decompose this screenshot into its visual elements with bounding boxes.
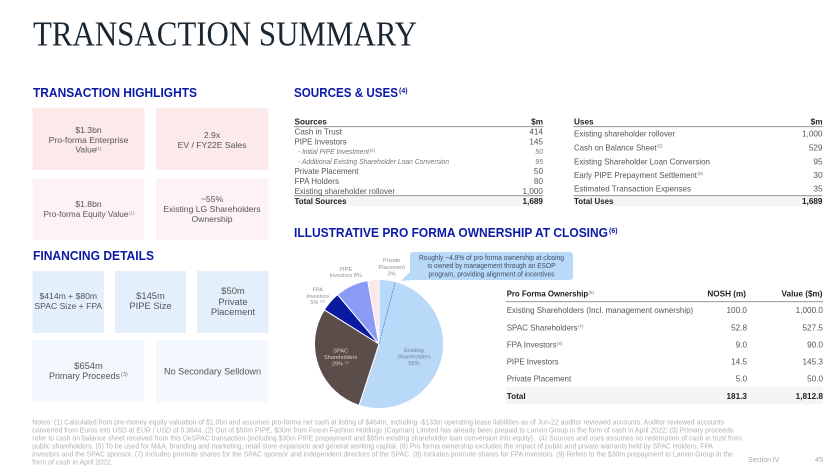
panel: LG shareholders ownership: Ownership (191, 214, 233, 224)
panel: PIPE size: $145m (136, 290, 165, 301)
table: pro forma ownership: 1,812.8 (796, 392, 823, 401)
table: uses: Cash on Balance Sheet (574, 143, 657, 152)
table: sources: 80 (534, 177, 543, 186)
table: pro forma ownership: 181.3 (726, 392, 747, 401)
panel: equity value (32, 178, 144, 240)
panel: primary proceeds (32, 340, 144, 402)
table: pro forma ownership: 90.0 (807, 341, 823, 350)
table: uses: Existing Shareholder Loan Conversion (574, 157, 710, 166)
table: sources: 95 (535, 159, 543, 166)
table: sources: Sources (294, 118, 327, 126)
panel: private placement: $50m (221, 285, 245, 296)
label: PIPE investors: PIPE (339, 267, 352, 273)
slice: existing shareholders (359, 280, 444, 408)
table: sources: - Additional Existing Shareholder Loan Conversion (298, 159, 449, 166)
footnotes: form of cash in April 2022. (32, 458, 113, 466)
panel: EV / sales: EV / FY22E Sales (178, 140, 246, 150)
table: uses: 95 (813, 157, 823, 166)
panel: SPAC size + FPA: SPAC Size + FPA (34, 301, 102, 311)
table: pro forma ownership: 145.3 (802, 358, 823, 367)
panel: primary proceeds: Primary Proceeds (49, 370, 120, 381)
table: pro forma ownership: (6) (588, 290, 595, 295)
footnotes (32, 418, 742, 466)
label: PIPE investors: Investors 8% (330, 273, 362, 279)
table: pro forma ownership: 527.5 (802, 323, 823, 332)
panel: LG shareholders ownership: Existing LG Shareholders (163, 204, 261, 214)
table: pro forma ownership: 100.0 (726, 306, 747, 315)
panel: private placement (197, 271, 268, 333)
table: uses: 30 (813, 171, 823, 180)
panel: enterprise value: Value (75, 144, 97, 154)
label: existing shareholders (397, 348, 431, 367)
label: FPA investors: 5% ⁽⁸⁾ (310, 299, 326, 306)
label: private placement: 3% (388, 272, 396, 278)
callout: ESOP note: Roughly ~4.8% of pro forma ownership at closing (419, 253, 564, 262)
panel: equity value: $1.8bn (75, 199, 102, 209)
panel: primary proceeds: $654m (74, 360, 103, 371)
heading: transaction highlights: TRANSACTION HIGHLIGHTS (33, 86, 197, 100)
slice: private placement (368, 280, 379, 344)
table: sources: Existing shareholder rollover (294, 187, 395, 196)
title: TRANSACTION SUMMARY (33, 16, 417, 54)
footer: section label: Section IV (748, 455, 779, 464)
table: sources: $m (531, 118, 543, 126)
label: existing shareholders: Shareholders (397, 354, 431, 360)
table: uses (574, 118, 823, 206)
panel: private placement: Private (218, 296, 248, 307)
table: pro forma ownership: Total (507, 392, 526, 401)
table: uses: 1,000 (802, 130, 823, 139)
panel: SPAC size + FPA (32, 271, 104, 333)
table: pro forma ownership: 9.0 (736, 341, 747, 350)
table: pro forma ownership: 5.0 (736, 375, 747, 384)
label: existing shareholders: Existing (404, 348, 424, 354)
table: uses: (5) (657, 144, 663, 148)
footnotes: public shareholders. (5) To be used for M&A, branding and marketing, retail store expansion and general working capital. (6) Pro forma ownership excludes the impact of public and private warrants held by SPAC Holders, FPA (32, 442, 713, 450)
label: private placement: Placement (378, 265, 405, 271)
table: pro forma ownership: 1,000.0 (796, 306, 823, 315)
table: uses: Estimated Transaction Expenses (574, 185, 691, 194)
label: SPAC shareholders: 29% ⁽⁷⁾ (332, 361, 350, 368)
footnotes: investors and the SPAC sponsor. (7) Includes promote shares for the SPAC sponsor and independent directors of the SPAC. (8) Includes promote shares for FPA investors. (9) Refers to the $30m prepayment to Lanvin Group in the (32, 450, 733, 458)
table: pro forma ownership: FPA Investors (507, 341, 557, 350)
table: uses: Early PIPE Prepayment Settlement (574, 171, 698, 180)
label: private placement (378, 258, 405, 278)
panel: equity value: Pro-forma Equity Value (44, 209, 129, 219)
heading: illustrative pro forma ownership: ILLUSTRATIVE PRO FORMA OWNERSHIP AT CLOSING (294, 226, 608, 240)
label: existing shareholders: 55% (408, 361, 420, 367)
panel: PIPE size: PIPE Size (129, 300, 172, 311)
heading: financing details: FINANCING DETAILS (33, 249, 154, 263)
table: uses: 1,689 (802, 197, 823, 206)
panel: enterprise value: $1.3bn (75, 125, 102, 135)
slice: FPA investors (324, 295, 379, 344)
pie chart: pro forma ownership (306, 258, 444, 408)
footnotes: converted from Euros into USD at EUR / USD of 0.9844. (2) Out of $50m PIPE, $30m from Fosun Fashion Holdings (Cayman) Limited has already been prepaid to Lanvin Group in the form of cash in April 2022; (3) Primary proceeds (32, 426, 734, 434)
label: SPAC shareholders: Shareholders (324, 355, 358, 361)
table: sources: 145 (529, 138, 543, 147)
panel: PIPE size (115, 271, 186, 333)
table: pro forma ownership: (8) (557, 341, 563, 346)
table: pro forma ownership: Private Placement (507, 375, 572, 384)
table: uses: 529 (809, 143, 823, 152)
slice: PIPE investors (338, 280, 379, 344)
table: sources: Private Placement (294, 167, 359, 176)
panel: LG shareholders ownership: ~55% (201, 194, 223, 204)
table: pro forma ownership: 50.0 (807, 375, 823, 384)
table: sources: Total Sources (294, 197, 347, 206)
panel: SPAC size + FPA: $414m + $80m (40, 291, 97, 301)
table: sources: 1,689 (522, 197, 543, 206)
table: sources: PIPE Investors (294, 138, 346, 147)
table: pro forma ownership: (7) (578, 324, 584, 329)
table: sources (294, 118, 544, 206)
panel: equity value: (1) (129, 210, 135, 216)
panel: no secondary selldown: No Secondary Selldown (164, 366, 261, 376)
table: pro forma ownership: 52.8 (731, 323, 747, 332)
table: uses: Existing shareholder rollover (574, 130, 675, 139)
table: uses: (9) (698, 171, 704, 176)
footer: page number: 45 (815, 455, 823, 464)
heading: illustrative pro forma ownership: (6) (609, 228, 618, 235)
table: pro forma ownership: PIPE Investors (507, 358, 559, 367)
heading: sources and uses: SOURCES & USES (294, 86, 398, 100)
table: sources: - Initial PIPE Investment (298, 149, 370, 156)
table: uses: 35 (813, 185, 823, 194)
table: pro forma ownership: Existing Shareholders (Incl. management ownership) (507, 306, 693, 315)
panel: enterprise value: Pro-forma Enterprise (49, 135, 129, 145)
label: SPAC shareholders: SPAC (333, 349, 348, 355)
callout: ESOP note: program, providing alignment of incentives (428, 270, 555, 278)
panel: primary proceeds: (3) (121, 372, 128, 378)
ESOP dashed divider (379, 283, 395, 344)
table: sources: (2) (370, 148, 376, 153)
table: pro forma ownership: SPAC Shareholders (507, 323, 578, 332)
table: sources: Cash in Trust (294, 128, 343, 137)
heading: sources and uses: (4) (399, 88, 408, 95)
table: sources: 50 (534, 167, 543, 176)
table: sources: 50 (535, 149, 543, 156)
table: pro forma ownership: NOSH (m) (707, 290, 746, 298)
panel: EV / sales: 2.9x (204, 130, 221, 140)
panel: enterprise value: (1) (96, 146, 102, 151)
label: FPA investors: Investors (306, 294, 329, 300)
label: FPA investors: FPA (312, 288, 323, 294)
label: SPAC shareholders (324, 349, 358, 368)
table: uses: $m (811, 118, 822, 126)
panel: private placement: Placement (211, 306, 256, 317)
table: sources: 414 (529, 128, 543, 137)
panel: no secondary selldown (156, 340, 268, 402)
panel: EV / sales (156, 108, 268, 170)
panel: LG shareholders ownership (156, 178, 268, 240)
callout: ESOP note: is owned by management through an ESOP (428, 261, 556, 270)
table: pro forma ownership: Value ($m) (782, 290, 823, 298)
label: FPA investors (306, 288, 329, 306)
label: private placement: Private (383, 258, 400, 264)
footnotes: Notes: (1) Calculated from pre-money equity valuation of $1.0bn and assumes pro-forma net cash at listing of $464m, including -$133m operating lease liabilities as of Jun-22 auditor reviewed accounts. Auditor reviewed accounts (32, 418, 724, 426)
callout: ESOP note (401, 252, 573, 281)
table: uses: Total Uses (574, 197, 614, 206)
table: uses: Uses (574, 118, 594, 126)
table: sources: 1,000 (522, 187, 543, 196)
table: pro forma ownership: Pro Forma Ownership (507, 290, 588, 298)
table: pro forma ownership (506, 290, 823, 404)
panel: enterprise value (32, 108, 144, 170)
table: sources: FPA Holders (294, 177, 339, 186)
slice: SPAC shareholders (315, 310, 379, 405)
footnotes: refer to cash on balance sheet received from this DeSPAC transaction (including $30m PIPE prepayment and $95m existing shareholder loan conversion into equity) . (4) Sources and uses assumes no redemption of cash in trust from (32, 434, 742, 442)
table: pro forma ownership: 14.5 (731, 358, 747, 367)
label: PIPE investors (330, 267, 362, 279)
